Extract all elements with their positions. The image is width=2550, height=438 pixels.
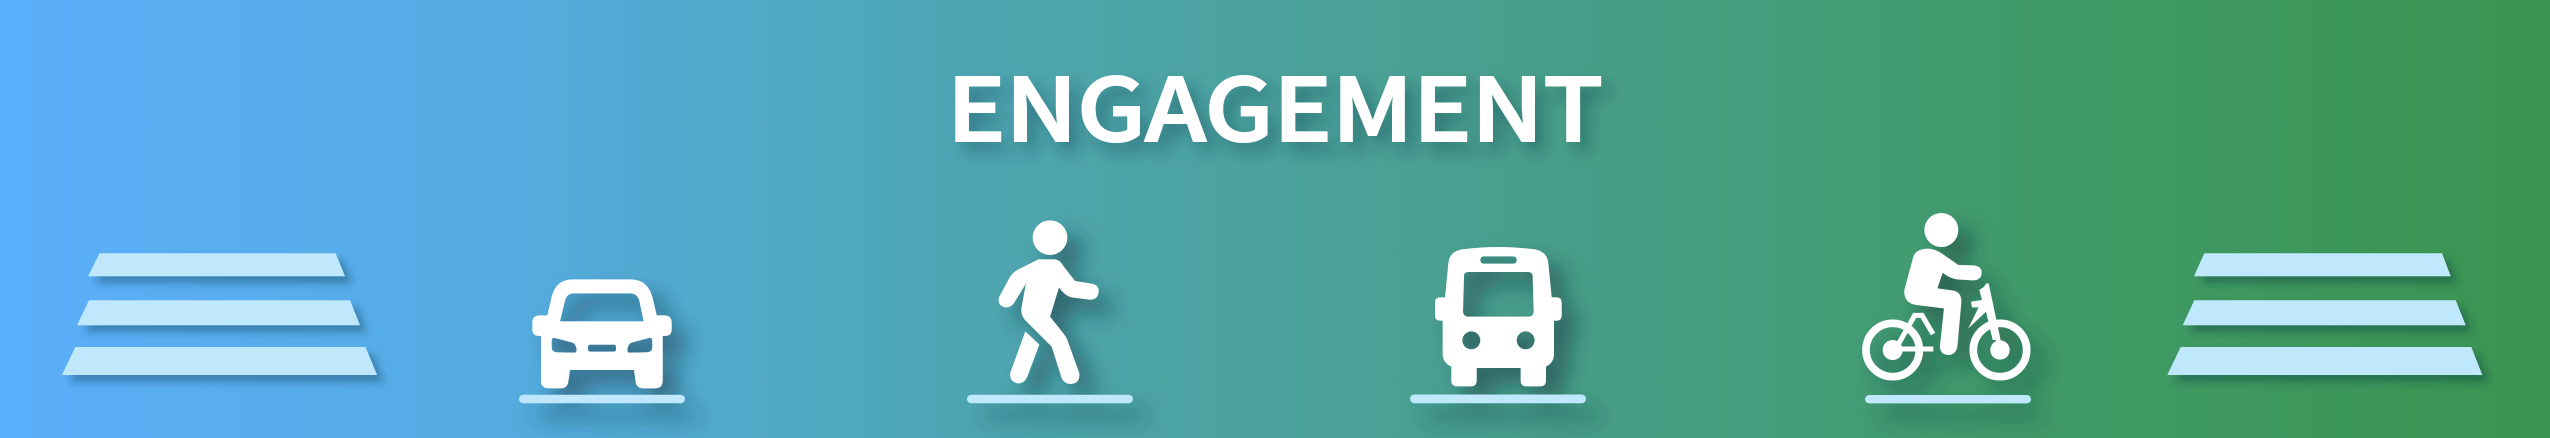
car road line xyxy=(519,395,685,403)
bus road line xyxy=(1410,394,1586,403)
icon: pedestrian xyxy=(999,220,1099,384)
icon: car xyxy=(532,279,672,388)
cyclist road line xyxy=(1865,395,2031,403)
crosswalk stripes: right xyxy=(2167,253,2482,375)
icon: cyclist xyxy=(1866,213,2027,377)
icon: bus xyxy=(1435,247,1562,386)
pedestrian road line xyxy=(967,395,1133,403)
crosswalk stripes: left xyxy=(62,253,377,375)
title: ENGAGEMENT xyxy=(947,41,1603,167)
